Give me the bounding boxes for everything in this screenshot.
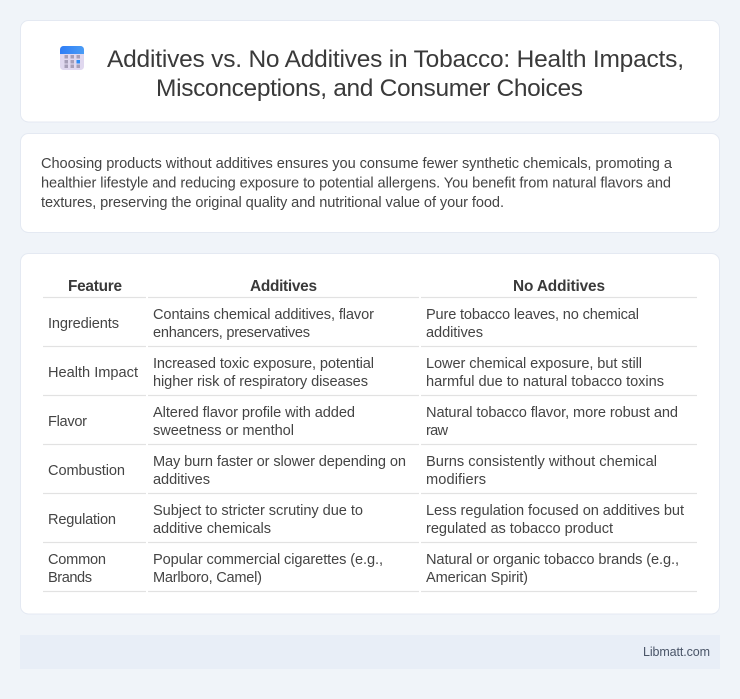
- footer bar: [20, 635, 720, 669]
- panel: title card: [20, 20, 720, 122]
- row: Common Brands: Popular commercial cigarettes (e.g.,: [153, 552, 383, 568]
- panel: comparison table: [20, 254, 720, 614]
- row: Common Brands: Brands: [48, 570, 92, 586]
- row: Ingredients: Pure tobacco leaves, no chemical: [426, 307, 639, 323]
- row: Common Brands: Common: [48, 552, 106, 568]
- icon: calendar: [60, 46, 84, 70]
- title: Additives vs. No Additives in Tobacco: Health Impacts,: [107, 46, 684, 73]
- row: Combustion: [43, 454, 697, 494]
- intro text: textures, preserving the original quality and nutritional value of your food.: [41, 195, 504, 211]
- row: Health Impact: Increased toxic exposure, potential: [153, 356, 374, 372]
- row: Common Brands: American Spirit): [426, 570, 528, 586]
- card background: [20, 134, 720, 232]
- row: Ingredients: [43, 307, 697, 346]
- row: Regulation: regulated as tobacco product: [426, 521, 613, 537]
- intro text: Choosing products without additives ensures you consume fewer synthetic chemicals, promoting a: [41, 156, 673, 172]
- row: Ingredients: enhancers, preservatives: [153, 325, 310, 341]
- row: Flavor: sweetness or menthol: [153, 423, 294, 439]
- row: Health Impact: Lower chemical exposure, but still: [426, 356, 642, 372]
- intro text: [41, 156, 673, 211]
- row: Ingredients: additives: [426, 325, 483, 341]
- row: Health Impact: harmful due to natural tobacco toxins: [426, 374, 664, 390]
- row: Regulation: additive chemicals: [153, 521, 271, 537]
- row: Common Brands: [43, 552, 697, 592]
- table header: [43, 278, 697, 298]
- row: Flavor: Flavor: [48, 414, 87, 430]
- row: Health Impact: higher risk of respiratory diseases: [153, 374, 368, 390]
- row: Combustion: Combustion: [48, 463, 125, 479]
- row: Ingredients: Ingredients: [48, 316, 119, 332]
- row: Common Brands: Marlboro, Camel): [153, 570, 262, 586]
- row: Flavor: Altered flavor profile with added: [153, 405, 355, 421]
- card background: [20, 20, 720, 122]
- footer: [20, 635, 720, 669]
- panel: introduction: [20, 134, 720, 232]
- row: Flavor: [43, 405, 697, 444]
- intro text: healthier lifestyle and reducing exposure to potential allergens. You benefit from natural flavors and: [41, 176, 671, 192]
- table header: Additives: [250, 278, 317, 295]
- row: Combustion: modifiers: [426, 472, 486, 488]
- row: Flavor: raw: [426, 423, 448, 439]
- row: Health Impact: [43, 356, 697, 396]
- row: Regulation: Subject to stricter scrutiny due to: [153, 503, 363, 519]
- row: Regulation: Less regulation focused on additives but: [426, 503, 684, 519]
- title: [107, 46, 684, 102]
- title: Misconceptions, and Consumer Choices: [156, 75, 583, 102]
- row: Combustion: additives: [153, 472, 210, 488]
- row: Combustion: May burn faster or slower depending on: [153, 454, 406, 470]
- row: Common Brands: Natural or organic tobacco brands (e.g.,: [426, 552, 679, 568]
- row: Combustion: Burns consistently without chemical: [426, 454, 657, 470]
- row: Ingredients: Contains chemical additives, flavor: [153, 307, 374, 323]
- row: Regulation: [43, 503, 697, 542]
- table header: Feature: [68, 278, 122, 295]
- card background: [20, 254, 720, 614]
- row: Health Impact: Health Impact: [48, 365, 138, 381]
- row: Regulation: Regulation: [48, 512, 116, 528]
- table header: No Additives: [513, 278, 605, 295]
- footer credit: Libmatt.com: [643, 645, 710, 659]
- row: Flavor: Natural tobacco flavor, more robust and: [426, 405, 678, 421]
